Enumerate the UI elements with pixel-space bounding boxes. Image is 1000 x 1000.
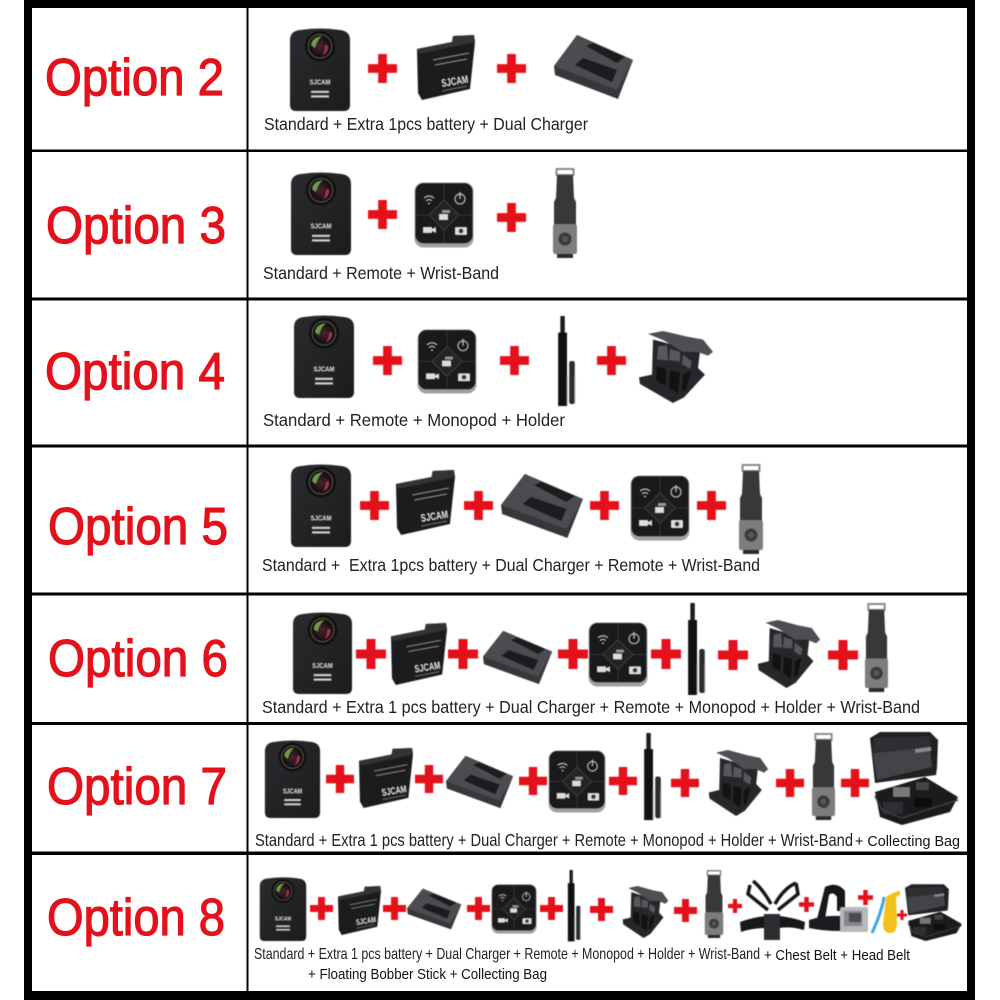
icon: plus [651,639,681,669]
icon: plus [368,200,397,229]
icon: plus [799,897,814,912]
caption line 1: Standard + Extra 1 pcs battery + Dual Charger + Remote + Monopod + Holder + Wrist-Band [254,946,760,963]
icon: chest belt [740,881,805,940]
heading: option 3: Option 3 [46,197,226,255]
caption: Standard + Extra 1 pcs battery + Dual Charger + Remote + Monopod + Holder + Wrist-Band [262,697,920,717]
icon: battery [417,35,475,100]
icon: battery [359,748,413,808]
icon: monopod [568,870,581,941]
heading: option 5: Option 5 [48,498,228,556]
icon: remote [588,622,648,687]
icon: plus [383,897,406,920]
icon: plus [326,765,354,793]
icon: camera [260,877,306,941]
icon: plus [776,769,804,797]
icon: holder [758,620,820,688]
icon: wrist band [865,604,888,692]
panel: option 4 [32,300,967,444]
panel: option 5 [32,448,967,592]
icon: wrist band [739,465,763,554]
icon: monopod [558,316,575,406]
icon: plus [464,491,493,520]
icon: plus [590,898,613,921]
caption: Standard + Extra 1pcs battery + Dual Charger [264,114,588,134]
icon: plus [310,897,333,920]
caption line 2: + Floating Bobber Stick + Collecting Bag [308,966,547,983]
icon: plus [467,897,490,920]
icon: holder [623,886,668,938]
icon: plus [500,346,529,375]
icon: floating bobber [872,891,900,933]
icon: monopod [688,603,705,695]
icon: plus [728,899,742,913]
panel: option 7 [32,725,967,852]
icon: dual charger [501,474,583,538]
icon: plus [718,640,748,670]
icon: camera [293,612,352,694]
icon: plus [841,769,869,797]
icon: plus [519,767,547,795]
icon: plus [497,203,526,232]
icon: plus [540,897,563,920]
icon: collecting bag [870,732,958,825]
heading: option 7: Option 7 [47,758,227,816]
icon: remote [414,182,474,248]
caption: chest and head belt: + Chest Belt + Head Belt [764,947,911,964]
icon: camera [290,29,350,111]
icon: plus [590,491,619,520]
icon: plus [697,491,726,520]
icon: remote [491,884,537,934]
icon: plus [448,639,478,669]
icon: plus [609,767,637,795]
icon: holder [639,331,713,403]
icon: monopod [644,733,661,820]
heading: option 4: Option 4 [45,343,225,401]
panel: option 8 [32,855,967,991]
caption: Standard + Remote + Wrist-Band [263,263,499,283]
icon: plus [360,491,389,520]
icon: plus [415,765,443,793]
caption: collecting bag: + Collecting Bag [855,833,960,850]
panel: option 3 [32,152,967,298]
icon: remote [548,750,606,813]
caption: Standard + Extra 1pcs battery + Dual Charger + Remote + Wrist-Band [262,555,760,575]
icon: camera [265,740,320,818]
icon: battery [391,623,447,685]
icon: plus [497,54,526,83]
icon: collecting bag [905,884,962,941]
icon: wrist band [705,871,723,938]
icon: battery [396,470,455,535]
icon: dual charger [407,889,461,929]
icon: plus [597,346,626,375]
caption: Standard + Remote + Monopod + Holder [263,410,565,430]
icon: plus [356,639,386,669]
icon: camera [291,465,351,547]
icon: holder [709,750,768,816]
heading: option 6: Option 6 [48,630,228,688]
panel: option 2 [32,8,967,150]
icon: plus [373,346,402,375]
icon: dual charger [554,35,633,99]
caption: Standard + Extra 1 pcs battery + Dual Charger + Remote + Monopod + Holder + Wrist-Band [255,830,853,850]
icon: camera [291,173,351,255]
heading: option 2: Option 2 [45,49,224,107]
icon: plus [828,640,858,670]
icon: camera [294,316,354,398]
icon: plus [897,910,907,920]
icon: dual charger [483,631,552,684]
panel: option 6 [32,596,967,722]
icon: head belt [809,885,868,932]
icon: plus [368,54,397,83]
icon: remote [630,476,690,540]
icon: wrist band [812,734,835,820]
icon: plus [558,639,588,669]
icon: wrist band [553,169,577,258]
icon: dual charger [446,756,513,808]
icon: plus [671,769,699,797]
icon: remote [418,329,476,394]
icon: battery [338,886,381,935]
heading: option 8: Option 8 [47,889,225,947]
icon: plus [674,899,697,922]
icon: plus [858,890,873,905]
